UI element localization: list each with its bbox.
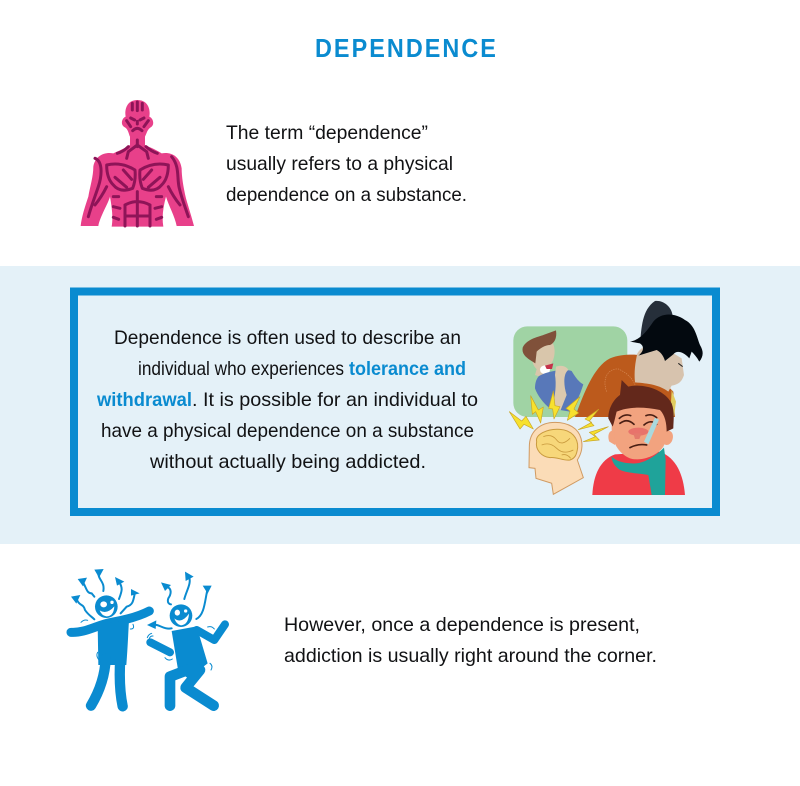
icon: two shaking figures — [71, 569, 225, 706]
panel text: have a physical dependence on a substance — [101, 420, 474, 442]
panel text: withdrawal — [96, 389, 192, 411]
text block: definition of dependence — [226, 122, 467, 206]
woman bending over — [575, 301, 703, 417]
panel text: individual who experiences — [138, 358, 344, 380]
text block: definition of dependence: usually refers to a physical — [226, 153, 453, 175]
panel text: tolerance and — [349, 358, 466, 380]
illustration: withdrawal symptoms collage — [509, 301, 703, 495]
text block: dependence leads to addiction — [284, 614, 657, 667]
panel text: . It is possible for an individual to — [192, 389, 478, 411]
right figure — [150, 604, 225, 706]
panel text: without actually being addicted. — [149, 451, 426, 473]
title: DEPENDENCE — [315, 35, 496, 63]
panel frame — [74, 292, 716, 512]
text block: definition of dependence: dependence on a substance. — [226, 184, 467, 206]
panel: tolerance and withdrawal — [0, 266, 800, 544]
feverish boy with thermometer — [592, 380, 685, 495]
green panel with shaking person — [513, 326, 627, 417]
shake marks — [81, 620, 214, 670]
icon: muscular human torso — [81, 100, 194, 227]
arrowheads — [71, 569, 212, 629]
left figure — [71, 595, 149, 706]
motion arrows — [77, 573, 208, 629]
text block: dependence leads to addiction: addiction is usually right around the corner. — [284, 645, 657, 667]
panel text: Dependence is often used to describe an — [114, 327, 461, 349]
text block: dependence leads to addiction: However, once a dependence is present, — [284, 614, 640, 636]
text block: definition of dependence: The term “dependence” — [226, 122, 428, 144]
head profile with brain — [529, 422, 583, 494]
lightning bolts — [509, 391, 608, 442]
panel background band — [0, 266, 800, 544]
panel text — [96, 327, 478, 473]
